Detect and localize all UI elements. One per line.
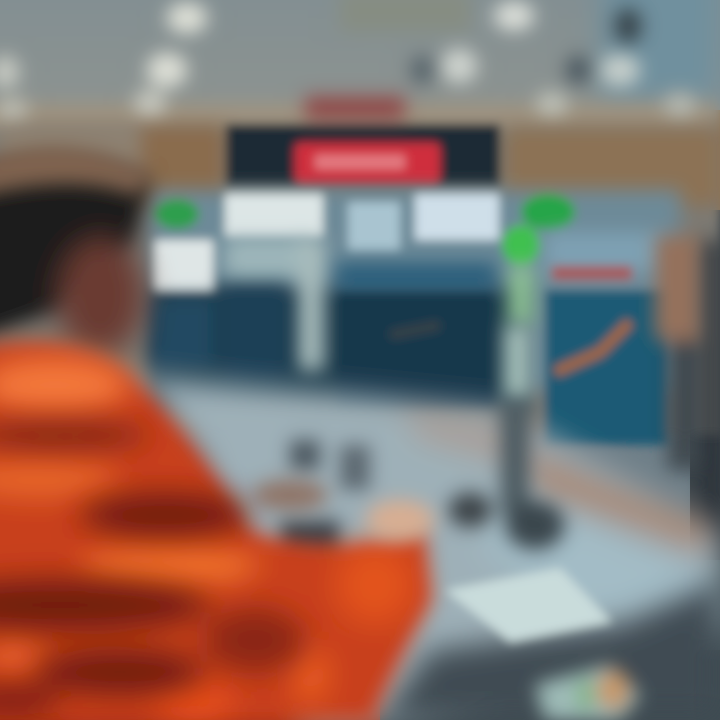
- monitors background: [150, 190, 680, 410]
- person hair: [0, 146, 155, 345]
- keyboard bottom right: [535, 665, 640, 720]
- dark ceiling fixtures: [410, 8, 642, 85]
- dark sign backing: [226, 96, 500, 186]
- right edge dark post: [704, 240, 720, 550]
- paper on desk: [445, 568, 612, 642]
- hand on desk: [252, 479, 434, 540]
- desk surface: [130, 375, 720, 720]
- brown figure at right: [655, 235, 702, 470]
- ceiling lights: [0, 0, 696, 122]
- person face: [56, 235, 144, 355]
- ceiling background: [0, 0, 720, 435]
- blue chart screens: [152, 232, 667, 445]
- jacket highlights: [0, 357, 415, 720]
- desk dark equipment: [280, 400, 565, 560]
- tan back wall: [0, 125, 720, 210]
- chart line on right screen: [390, 322, 630, 372]
- orange jacket: [0, 342, 432, 720]
- white screen tops: [155, 194, 499, 370]
- green markers: [155, 194, 575, 400]
- lower right dark desk: [380, 580, 720, 720]
- red sign: [295, 143, 440, 183]
- jacket dark folds: [0, 422, 305, 716]
